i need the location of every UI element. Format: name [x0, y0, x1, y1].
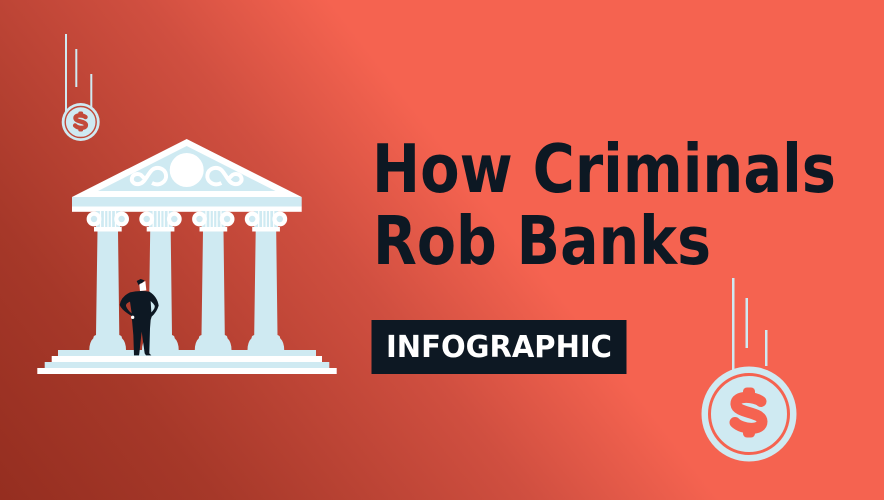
title: Rob Banks [373, 202, 711, 280]
tag: infographic label: INFOGRAPHIC [386, 330, 612, 365]
figure: man in black with hands on hips [120, 279, 159, 355]
title [372, 130, 836, 280]
tag: infographic label [372, 320, 626, 374]
column 4 [245, 211, 287, 350]
entablature [72, 197, 302, 212]
icon: small falling coin [62, 34, 100, 141]
column 3 [192, 211, 234, 350]
pediment [72, 139, 302, 197]
column 2 [139, 211, 182, 350]
steps [37, 350, 337, 374]
icon: large falling coin [702, 278, 796, 462]
icon: bank building [37, 139, 337, 374]
column 1 [87, 211, 129, 350]
